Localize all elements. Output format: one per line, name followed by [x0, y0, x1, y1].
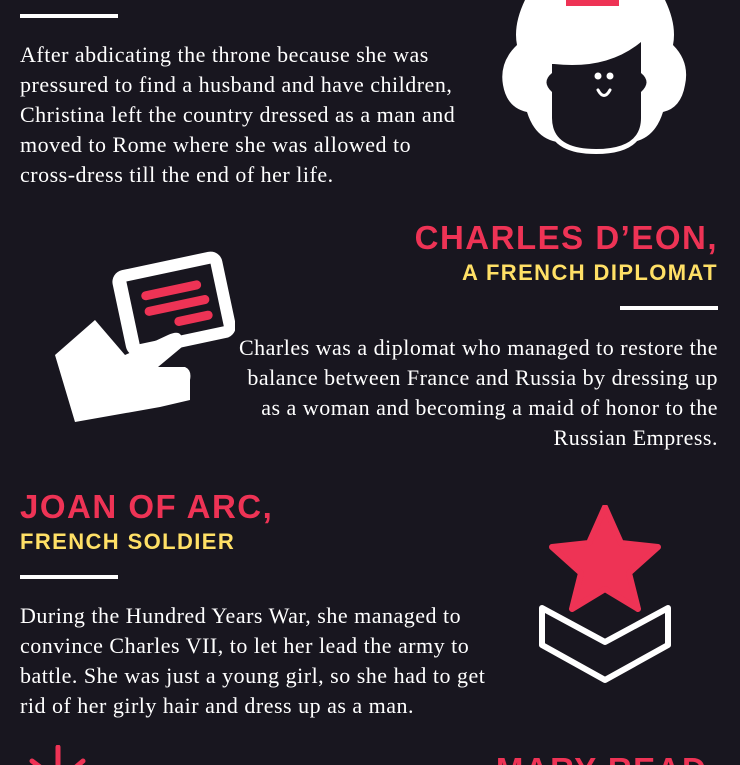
icon: woman face [502, 0, 686, 154]
text: Christina: cross-dress till the end of her life. [20, 162, 334, 187]
icon: partial burst [30, 745, 86, 765]
divider bar [20, 575, 118, 579]
subheading: French diplomat: A FRENCH DIPLOMAT [462, 260, 718, 285]
text: Christina [20, 42, 455, 187]
text: Christina: moved to Rome where she was allowed to [20, 132, 411, 157]
text: Christina: Christina left the country dressed as a man and [20, 102, 455, 127]
text: Charles: Charles was a diplomat who managed to restore the [239, 335, 718, 360]
text: Joan: convince Charles VII, to let her lead the army to [20, 633, 469, 658]
subheading: French soldier: FRENCH SOLDIER [20, 529, 235, 554]
text: Charles: balance between France and Russia by dressing up [247, 365, 718, 390]
text: Joan [20, 603, 485, 718]
heading: Joan of Arc: JOAN OF ARC, [20, 488, 273, 525]
text: Charles: as a woman and becoming a maid of honor to the [261, 395, 718, 420]
text: Charles [239, 335, 718, 450]
icon: hand holding card [55, 252, 235, 422]
heading: Charles D'Eon: CHARLES D’EON, [415, 219, 718, 256]
text: Christina: pressured to find a husband and have children, [20, 72, 452, 97]
icon: star and chevron [539, 505, 671, 683]
text: Joan: battle. She was just a young girl, so she had to get [20, 663, 485, 688]
text: Joan: rid of her girly hair and dress up as a man. [20, 693, 414, 718]
text: Christina: After abdicating the throne because she was [20, 42, 429, 67]
top divider bar [20, 14, 118, 18]
text: Joan: During the Hundred Years War, she managed to [20, 603, 461, 628]
text: Charles: Russian Empress. [554, 425, 718, 450]
divider bar [620, 306, 718, 310]
